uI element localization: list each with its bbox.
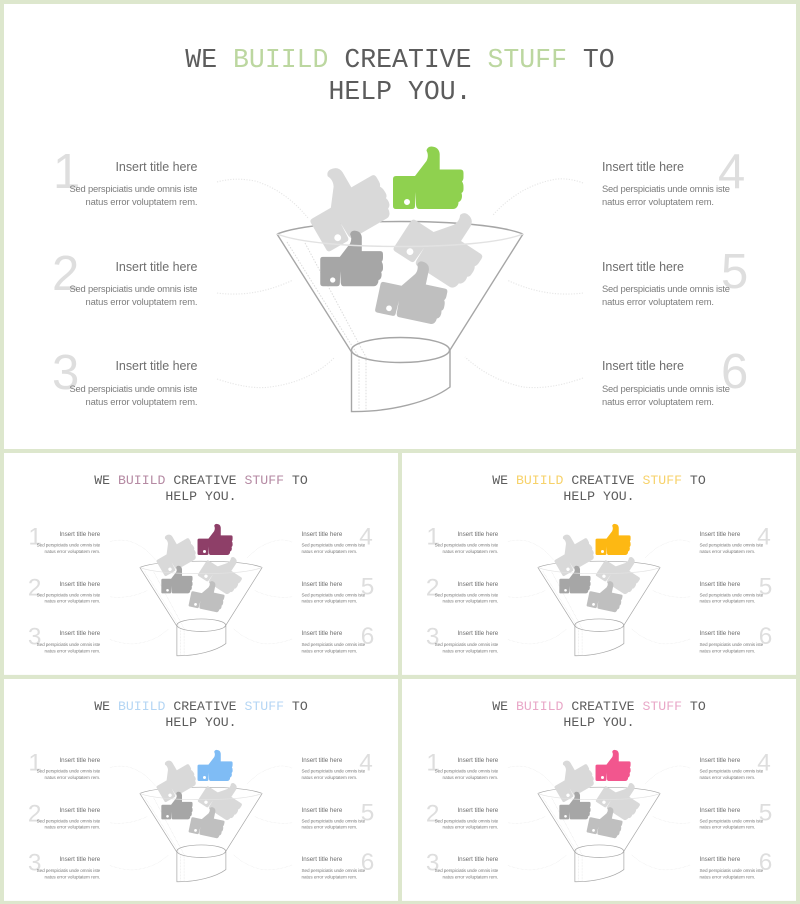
item 4: 4 <box>718 145 745 199</box>
panel: purple slide <box>4 453 398 675</box>
item 6: Insert title here <box>602 359 684 373</box>
item 6 <box>602 345 748 407</box>
items: Sed perspiciatis unde omnis iste <box>302 818 366 823</box>
items: Insert title here <box>302 531 343 538</box>
items: Sed perspiciatis unde omnis iste <box>37 868 101 873</box>
item 3: natus error voluptatem rem. <box>86 396 198 407</box>
items: Insert title here <box>457 856 499 863</box>
items: 6 <box>759 623 772 650</box>
items: Sed perspiciatis unde omnis iste <box>302 642 366 647</box>
items: natus error voluptatem rem. <box>45 825 100 830</box>
items: Insert title here <box>700 856 741 863</box>
items: Sed perspiciatis unde omnis iste <box>700 818 764 823</box>
panel: blue slide <box>4 679 398 901</box>
items: Sed perspiciatis unde omnis iste <box>302 543 366 548</box>
dotted connector curves <box>217 179 583 388</box>
title: WE BUIILD CREATIVE STUFF TO <box>185 45 615 75</box>
items: 3 <box>28 850 41 877</box>
items: Sed perspiciatis unde omnis iste <box>302 769 366 774</box>
items: 1 <box>28 524 42 551</box>
panel: pink slide <box>402 679 796 901</box>
item 1 <box>53 145 198 207</box>
items: Insert title here <box>457 757 499 764</box>
items: natus error voluptatem rem. <box>700 874 755 879</box>
items: Insert title here <box>302 757 343 764</box>
items: natus error voluptatem rem. <box>302 825 357 830</box>
items: 2 <box>28 574 41 601</box>
item 1: natus error voluptatem rem. <box>86 196 198 207</box>
items: Sed perspiciatis unde omnis iste <box>435 592 499 597</box>
items <box>426 750 772 879</box>
items: 4 <box>757 750 771 777</box>
items: Sed perspiciatis unde omnis iste <box>37 642 101 647</box>
item 5: natus error voluptatem rem. <box>602 296 714 307</box>
items: Sed perspiciatis unde omnis iste <box>37 769 101 774</box>
items: Insert title here <box>700 757 741 764</box>
items: 6 <box>361 849 374 876</box>
items: natus error voluptatem rem. <box>302 648 357 653</box>
title: WE BUIILD CREATIVE STUFF TO <box>492 699 706 714</box>
title: WE BUIILD CREATIVE STUFF TO <box>94 699 308 714</box>
items: Sed perspiciatis unde omnis iste <box>37 818 101 823</box>
items: Insert title here <box>302 581 343 588</box>
item 5: Insert title here <box>602 260 684 274</box>
title: WE BUIILD CREATIVE STUFF TO <box>492 473 706 488</box>
items: natus error voluptatem rem. <box>45 775 100 780</box>
items <box>28 524 374 653</box>
funnel with thumbs <box>140 524 262 656</box>
items: Sed perspiciatis unde omnis iste <box>700 592 764 597</box>
items: natus error voluptatem rem. <box>443 874 498 879</box>
items: 4 <box>359 750 373 777</box>
items: 3 <box>426 624 439 651</box>
item 4: natus error voluptatem rem. <box>602 196 714 207</box>
items: 1 <box>28 750 42 777</box>
items: natus error voluptatem rem. <box>700 825 755 830</box>
items: natus error voluptatem rem. <box>45 874 100 879</box>
item 2: Insert title here <box>116 260 198 274</box>
item 4 <box>602 145 745 207</box>
items: natus error voluptatem rem. <box>700 599 755 604</box>
title: HELP YOU. <box>563 715 635 730</box>
items: Insert title here <box>59 856 101 863</box>
items: natus error voluptatem rem. <box>302 775 357 780</box>
title: HELP YOU. <box>328 77 472 107</box>
items: natus error voluptatem rem. <box>443 648 498 653</box>
items: 2 <box>28 800 41 827</box>
item 2 <box>52 247 198 307</box>
item 3: Insert title here <box>116 359 198 373</box>
items: natus error voluptatem rem. <box>700 775 755 780</box>
items: 5 <box>361 573 374 600</box>
items: 4 <box>359 524 373 551</box>
title <box>492 473 706 504</box>
items: natus error voluptatem rem. <box>443 775 498 780</box>
items: Insert title here <box>59 807 101 814</box>
item 6: Sed perspiciatis unde omnis iste <box>602 383 730 394</box>
item 2: 2 <box>52 247 79 301</box>
items: natus error voluptatem rem. <box>443 599 498 604</box>
items: Insert title here <box>302 807 343 814</box>
title <box>492 699 706 730</box>
items: natus error voluptatem rem. <box>443 825 498 830</box>
items: natus error voluptatem rem. <box>302 599 357 604</box>
item 3: Sed perspiciatis unde omnis iste <box>70 383 198 394</box>
items <box>426 524 772 653</box>
items: Insert title here <box>700 531 741 538</box>
funnel with thumbs <box>538 750 660 882</box>
items: 2 <box>426 800 439 827</box>
item 2: Sed perspiciatis unde omnis iste <box>70 283 198 294</box>
items: 1 <box>426 524 440 551</box>
items: natus error voluptatem rem. <box>45 549 100 554</box>
items: natus error voluptatem rem. <box>700 648 755 653</box>
items: 3 <box>426 850 439 877</box>
items: Sed perspiciatis unde omnis iste <box>700 868 764 873</box>
item 4: Sed perspiciatis unde omnis iste <box>602 183 730 194</box>
item 1: 1 <box>53 145 80 199</box>
item 1: Insert title here <box>116 160 198 174</box>
items: 5 <box>361 799 374 826</box>
dotted connector curves <box>508 540 690 644</box>
items: Insert title here <box>457 630 499 637</box>
items: 3 <box>28 624 41 651</box>
funnel with thumbs <box>277 146 523 412</box>
item 5: Sed perspiciatis unde omnis iste <box>602 283 730 294</box>
funnel with thumbs <box>538 524 660 656</box>
items: Insert title here <box>59 581 101 588</box>
items: Sed perspiciatis unde omnis iste <box>435 868 499 873</box>
panel: main green slide <box>4 4 796 449</box>
title: HELP YOU. <box>563 489 635 504</box>
items: Sed perspiciatis unde omnis iste <box>435 769 499 774</box>
items: Sed perspiciatis unde omnis iste <box>37 543 101 548</box>
items: natus error voluptatem rem. <box>302 549 357 554</box>
items: Sed perspiciatis unde omnis iste <box>435 543 499 548</box>
items: Sed perspiciatis unde omnis iste <box>435 642 499 647</box>
title: HELP YOU. <box>165 489 237 504</box>
items: Sed perspiciatis unde omnis iste <box>700 642 764 647</box>
items: Insert title here <box>700 581 741 588</box>
items: natus error voluptatem rem. <box>443 549 498 554</box>
item 4: Insert title here <box>602 160 684 174</box>
title: HELP YOU. <box>165 715 237 730</box>
item 3: 3 <box>52 346 79 400</box>
items: Sed perspiciatis unde omnis iste <box>700 769 764 774</box>
panel: yellow slide <box>402 453 796 675</box>
items: Insert title here <box>700 630 741 637</box>
items: Insert title here <box>457 807 499 814</box>
dotted connector curves <box>508 766 690 870</box>
funnel with thumbs <box>140 750 262 882</box>
items: Sed perspiciatis unde omnis iste <box>37 592 101 597</box>
title <box>94 699 308 730</box>
item 6: 6 <box>721 345 748 399</box>
items: 5 <box>759 573 772 600</box>
items: 2 <box>426 574 439 601</box>
items: Sed perspiciatis unde omnis iste <box>435 818 499 823</box>
items: Sed perspiciatis unde omnis iste <box>302 868 366 873</box>
items: Insert title here <box>302 630 343 637</box>
items: Insert title here <box>457 581 499 588</box>
items: Sed perspiciatis unde omnis iste <box>302 592 366 597</box>
items: 5 <box>759 799 772 826</box>
item 5 <box>602 245 748 307</box>
item 5: 5 <box>721 245 748 299</box>
items: 6 <box>759 849 772 876</box>
items: Sed perspiciatis unde omnis iste <box>700 543 764 548</box>
dotted connector curves <box>110 766 292 870</box>
dotted connector curves <box>110 540 292 644</box>
items: natus error voluptatem rem. <box>302 874 357 879</box>
items: Insert title here <box>59 630 101 637</box>
items: Insert title here <box>59 531 101 538</box>
title <box>185 45 615 107</box>
item 1: Sed perspiciatis unde omnis iste <box>70 183 198 194</box>
title <box>94 473 308 504</box>
item 6: natus error voluptatem rem. <box>602 396 714 407</box>
item 3 <box>52 346 198 407</box>
items <box>28 750 374 879</box>
items: natus error voluptatem rem. <box>45 648 100 653</box>
items: Insert title here <box>302 856 343 863</box>
items: 6 <box>361 623 374 650</box>
items: 1 <box>426 750 440 777</box>
items: 4 <box>757 524 771 551</box>
item 2: natus error voluptatem rem. <box>86 296 198 307</box>
title: WE BUIILD CREATIVE STUFF TO <box>94 473 308 488</box>
items: natus error voluptatem rem. <box>45 599 100 604</box>
items: Insert title here <box>457 531 499 538</box>
items: Insert title here <box>700 807 741 814</box>
items: Insert title here <box>59 757 101 764</box>
items: natus error voluptatem rem. <box>700 549 755 554</box>
